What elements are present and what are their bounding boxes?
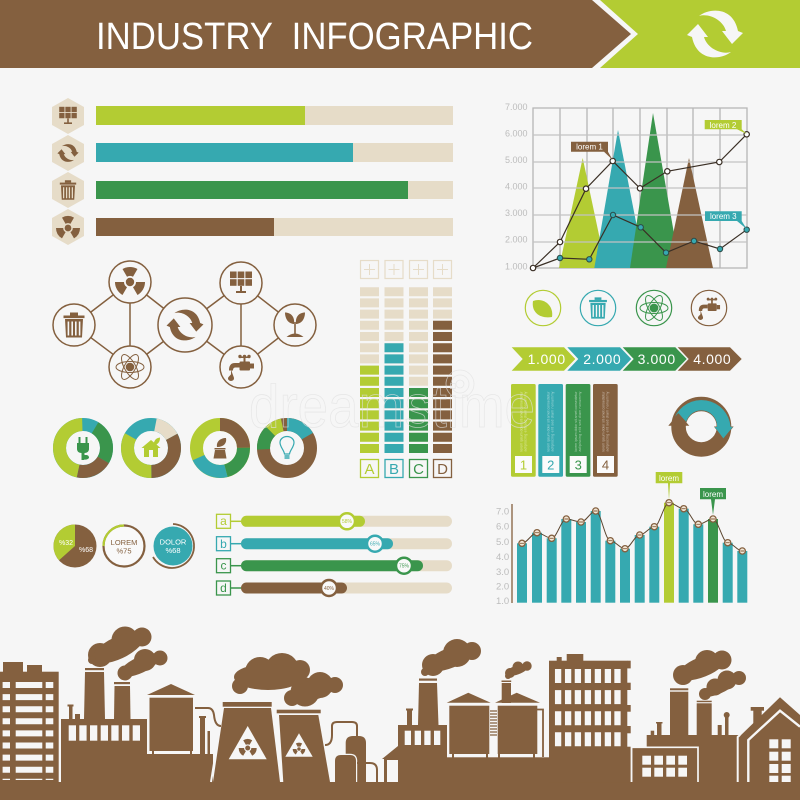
slider c: c bbox=[220, 558, 226, 572]
card 1: lorem ipsum dolor sit amet consectetur bbox=[519, 391, 523, 452]
card 2: lorem ipsum dolor sit amet consectetur bbox=[547, 391, 551, 452]
node: trash bbox=[53, 304, 95, 346]
slider c bbox=[216, 558, 452, 574]
header: lime band bbox=[600, 0, 800, 68]
card 3: adipiscing elit sed diam nonummy bbox=[578, 391, 582, 452]
header banner bbox=[0, 0, 800, 68]
icon: atom bbox=[636, 290, 672, 326]
donut 1 with plug bbox=[60, 424, 106, 472]
axis labels: 3.000 bbox=[505, 208, 528, 218]
card 4: adipiscing elit sed diam nonummy bbox=[605, 391, 609, 452]
callout: lime lorem bbox=[656, 472, 682, 500]
axis labels: 2.0 bbox=[496, 582, 509, 592]
ring: lorem 75: LOREM bbox=[111, 538, 137, 547]
axis labels: 6.0 bbox=[496, 522, 509, 532]
step 4.000 bbox=[678, 347, 742, 371]
card 1: adipiscing elit sed diam nonummy bbox=[523, 391, 527, 452]
bar 3 with trash hexagon bbox=[52, 172, 453, 208]
card 4: lorem ipsum dolor sit amet consectetur bbox=[601, 391, 605, 452]
step 1.000: 1.000 bbox=[528, 351, 566, 367]
slider b: b bbox=[220, 537, 227, 551]
house bbox=[738, 697, 800, 783]
factory with chimneys and smoke bbox=[61, 626, 168, 783]
step 3.000: 3.000 bbox=[638, 351, 676, 367]
tank and pipes bbox=[147, 684, 221, 783]
callout: lorem 2 bbox=[705, 120, 747, 134]
watermark: dreamstime bbox=[249, 373, 535, 440]
icon: faucet bbox=[691, 290, 727, 326]
column B: B bbox=[389, 461, 399, 478]
panel: bar and curve chart bbox=[496, 472, 747, 607]
bar 1 with solar hexagon bbox=[52, 98, 453, 134]
ring: lorem 75 bbox=[104, 526, 144, 566]
slider d bbox=[216, 580, 452, 596]
card 2 bbox=[538, 384, 563, 477]
title: INDUSTRY INFOGRAPHIC bbox=[96, 16, 533, 58]
twin tanks bbox=[447, 661, 549, 783]
donut 3 with factory leaf bbox=[196, 424, 244, 472]
header: brown arrow bbox=[0, 0, 631, 68]
panel: triangle and line chart bbox=[505, 102, 749, 272]
step 2.000 bbox=[567, 347, 631, 371]
icon: light bulb bbox=[280, 436, 294, 458]
slider a: 58% bbox=[342, 519, 353, 525]
bars bbox=[517, 503, 747, 603]
axis labels: 4.000 bbox=[505, 182, 528, 192]
axis labels: 7.0 bbox=[496, 506, 509, 518]
slider a bbox=[216, 513, 452, 529]
axis labels: 3.0 bbox=[496, 567, 509, 578]
curve line bbox=[522, 503, 742, 551]
icon: circular arrows bbox=[668, 400, 733, 449]
axis labels: 4.0 bbox=[496, 552, 509, 563]
triangle series bbox=[559, 113, 713, 268]
step 4.000: 4.000 bbox=[693, 351, 731, 367]
panel: slider bars bbox=[216, 513, 452, 596]
card 1: 1 bbox=[520, 458, 527, 472]
node: recycle centre bbox=[158, 298, 212, 352]
card 3: lorem ipsum dolor sit amet consectetur bbox=[574, 391, 578, 452]
callout: lorem 2: lorem 2 bbox=[710, 121, 737, 130]
column D bbox=[434, 260, 452, 478]
axis labels: 2.000 bbox=[505, 234, 528, 244]
apartment building left bbox=[0, 662, 59, 783]
skyline illustration bbox=[0, 626, 800, 800]
panel: numbered vertical cards bbox=[511, 384, 618, 477]
cooling tower 1 with radiation sign bbox=[211, 653, 310, 782]
card 2: adipiscing elit sed diam nonummy bbox=[551, 391, 555, 452]
slider b: 65% bbox=[370, 542, 381, 548]
ring: dolor 68 bbox=[153, 524, 194, 568]
callout: lorem 3 bbox=[705, 211, 747, 229]
card 1 bbox=[511, 384, 536, 477]
axis labels: 1.0 bbox=[496, 596, 509, 607]
column C bbox=[410, 260, 428, 478]
card 3 bbox=[566, 384, 590, 477]
node: atom bbox=[109, 346, 151, 388]
node: faucet bbox=[220, 346, 262, 388]
ring: dolor 68: %68 bbox=[165, 546, 181, 555]
bar 2 with recycle hexagon bbox=[52, 135, 453, 171]
card 4: 4 bbox=[602, 458, 609, 472]
node: radiation bbox=[109, 261, 151, 303]
curve dots bbox=[519, 500, 745, 554]
column A bbox=[360, 260, 378, 478]
icon: plug bbox=[77, 437, 89, 460]
card 4 bbox=[593, 384, 618, 477]
donut 2 with house bbox=[128, 424, 174, 472]
icon: leaf bbox=[525, 290, 561, 326]
axis labels: 5.0 bbox=[496, 537, 509, 548]
callout: green lorem bbox=[700, 488, 726, 515]
icon: house bbox=[142, 438, 160, 457]
right factory bbox=[632, 648, 746, 783]
slider b bbox=[216, 536, 452, 552]
panel: stacked block columns bbox=[360, 260, 452, 478]
line series: lorem 3 bbox=[530, 212, 749, 271]
slider d: 40% bbox=[324, 586, 335, 592]
slider a: a bbox=[220, 514, 227, 528]
callout: lorem 1: lorem 1 bbox=[576, 142, 603, 152]
callout: lorem 1 bbox=[571, 142, 613, 160]
axis labels bbox=[496, 506, 509, 607]
factory with single chimney bbox=[400, 639, 481, 783]
panel: donut charts bbox=[60, 424, 310, 472]
axis labels: 6.000 bbox=[505, 128, 528, 138]
panel: icon network diagram bbox=[53, 261, 316, 388]
card 3: 3 bbox=[575, 458, 582, 472]
icon: factory with leaf bbox=[214, 438, 226, 458]
node: solar panel bbox=[220, 262, 262, 304]
icon row under chart bbox=[525, 290, 727, 326]
bar 4 with radiation hexagon bbox=[52, 209, 453, 245]
office tower bbox=[549, 654, 631, 783]
icon: trash bbox=[580, 290, 616, 326]
donut 4 with bulb bbox=[264, 424, 310, 472]
callout: lorem 3: lorem 3 bbox=[710, 212, 737, 221]
column D: D bbox=[437, 461, 448, 478]
panel: horizontal progress bars bbox=[52, 98, 453, 245]
slider c: 75% bbox=[399, 564, 410, 570]
axis labels: 1.000 bbox=[505, 262, 528, 272]
step 3.000 bbox=[623, 347, 687, 371]
ring: dolor 68: DOLOR bbox=[160, 538, 187, 546]
step 1.000 bbox=[512, 347, 575, 371]
column C: C bbox=[413, 461, 424, 478]
column B bbox=[385, 260, 403, 478]
step 2.000: 2.000 bbox=[583, 351, 621, 367]
pie: 32 / 68 bbox=[54, 524, 96, 568]
node: plant bbox=[274, 304, 316, 346]
axis labels: 5.000 bbox=[505, 155, 528, 165]
pie: 32 / 68: %68 bbox=[79, 547, 93, 554]
pie: 32 / 68: %32 bbox=[59, 540, 73, 547]
cooling tower 2 with radiation sign bbox=[277, 672, 343, 782]
slider d: d bbox=[220, 581, 227, 595]
pipes and cylinders bbox=[325, 722, 400, 782]
line series: lorem 1 and 2 bbox=[533, 132, 749, 268]
axis labels bbox=[505, 102, 528, 272]
ring: lorem 75: %75 bbox=[116, 546, 132, 556]
callout: lime lorem: lorem bbox=[659, 474, 679, 483]
panel: chevron steps bbox=[512, 347, 742, 371]
column A: A bbox=[364, 461, 375, 478]
icon: recycle arrows in header bbox=[687, 11, 743, 57]
callout: green lorem: lorem bbox=[703, 490, 723, 499]
axis labels: 7.000 bbox=[505, 102, 528, 112]
card 2: 2 bbox=[547, 458, 554, 472]
